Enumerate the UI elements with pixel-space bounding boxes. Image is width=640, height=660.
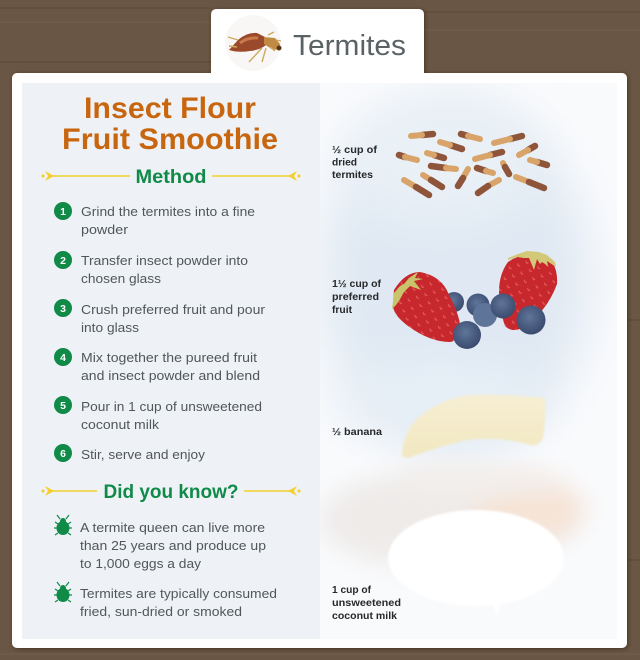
fact 1 (54, 515, 266, 571)
ingredient: banana (402, 395, 545, 458)
step 3: Crush preferred fruit and pour (81, 302, 266, 317)
step 1: powder (81, 222, 129, 237)
step 2: Transfer insect powder into (81, 253, 248, 268)
fact 1: than 25 years and produce up (80, 538, 266, 553)
step 4 (54, 348, 260, 383)
step 1: Grind the termites into a fine (81, 204, 255, 219)
step 6: Stir, serve and enjoy (81, 447, 205, 462)
step 5: Pour in 1 cup of unsweetened (81, 399, 262, 414)
label: dried termites: termites (332, 170, 373, 181)
fact 1: A termite queen can live more (80, 520, 265, 535)
label: fruit (332, 279, 382, 316)
icon: bug (54, 515, 72, 535)
watercolor wash (320, 83, 616, 574)
label: fruit: 1½ cup of (332, 279, 382, 290)
step 3 (54, 299, 266, 335)
icon: termite (225, 15, 282, 71)
step 3: 3 (60, 303, 66, 315)
step 6 (54, 444, 205, 462)
label: dried termites (332, 145, 378, 181)
label: banana: ½ banana (332, 427, 382, 438)
label: coconut milk: 1 cup of (332, 585, 372, 596)
label: coconut milk: coconut milk (332, 611, 397, 622)
label: coconut milk (332, 585, 401, 622)
step 5 (54, 396, 262, 432)
ingredient: fruit (392, 251, 557, 349)
title: Insect Flour (84, 92, 257, 125)
step 6: 6 (60, 448, 66, 460)
label: dried termites: dried (332, 158, 357, 168)
label: Termites: Termites (293, 30, 406, 62)
panel: ingredients (320, 83, 617, 639)
ingredient: dried termites (399, 134, 547, 195)
fact 1: to 1,000 eggs a day (80, 556, 201, 571)
heading: Method (41, 166, 301, 188)
fact 2: fried, sun-dried or smoked (80, 604, 242, 619)
step 5: 5 (60, 400, 66, 412)
title (62, 92, 278, 156)
step 4: and insect powder and blend (81, 368, 260, 383)
fact 2: Termites are typically consumed (80, 586, 277, 601)
header tab (205, 9, 430, 83)
step 2: chosen glass (81, 271, 161, 286)
label: dried termites: ½ cup of (332, 145, 378, 156)
step 1 (54, 202, 255, 237)
title: Fruit Smoothie (62, 123, 278, 156)
step 3: into glass (81, 320, 139, 335)
ingredient: coconut milk (388, 510, 564, 614)
label: fruit: preferred (332, 292, 379, 303)
heading: Method: Method (136, 166, 206, 188)
right strawberry (499, 251, 557, 330)
tab background (211, 9, 424, 80)
icon: bug (54, 582, 72, 602)
step 2: 2 (60, 255, 66, 267)
step 4: 4 (60, 352, 66, 364)
heading: Did you know: Did you know? (104, 481, 238, 503)
left strawberry (392, 272, 460, 342)
label: fruit: fruit (332, 305, 353, 316)
heading: Did you know (41, 481, 301, 503)
panel: method and facts (22, 83, 320, 639)
step 5: coconut milk (81, 417, 159, 432)
step 4: Mix together the pureed fruit (81, 350, 257, 365)
label: coconut milk: unsweetened (332, 598, 401, 609)
step 1: 1 (60, 206, 66, 218)
step 2 (54, 251, 248, 286)
fact 2 (54, 582, 277, 619)
